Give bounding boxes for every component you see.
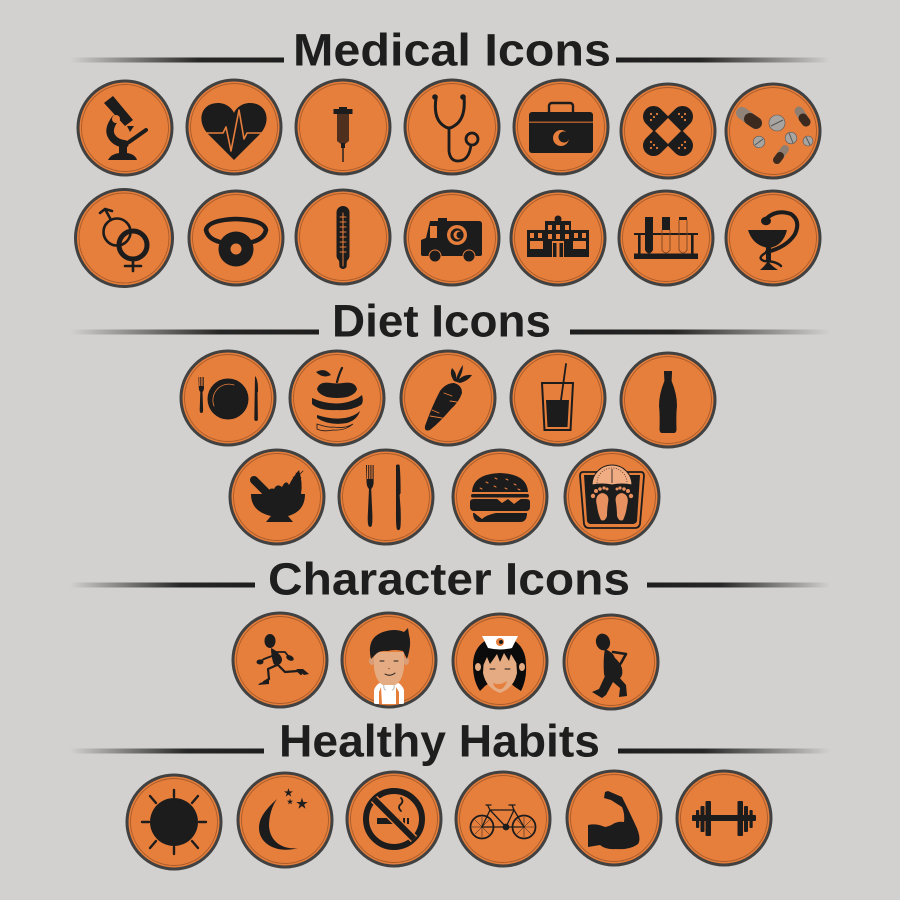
heading: Healthy Habits: Healthy Habits <box>279 716 600 766</box>
icon: peeled apple <box>290 351 384 445</box>
heading: Medical Icons <box>70 24 830 76</box>
icon: thermometer <box>296 190 390 284</box>
icon: mortar and pestle with herbs <box>230 450 324 544</box>
icon: crossed bandages <box>621 84 715 178</box>
icon: no smoking sign <box>347 772 441 866</box>
icon: crescent moon and stars: ★ <box>284 788 293 799</box>
icon: heart with pulse <box>187 80 281 174</box>
icon: bicycle <box>456 772 550 866</box>
icon: gender symbols <box>76 190 172 286</box>
icon: glass with straw <box>511 351 605 445</box>
icon: microscope <box>78 81 172 175</box>
icon: dumbbell <box>677 771 771 865</box>
icon: flexed arm muscle <box>567 771 661 865</box>
icon: male doctor character <box>342 613 436 707</box>
icon: sun <box>127 775 221 869</box>
heading: Medical Icons: Medical Icons <box>293 24 611 76</box>
heading: Character Icons: Character Icons <box>268 554 630 604</box>
heading: Diet Icons: Diet Icons <box>332 296 551 346</box>
icon: ambulance <box>405 191 499 285</box>
heading: Diet Icons <box>70 296 830 346</box>
icon: bowl of hygieia <box>726 191 820 285</box>
icon: plate and cutlery <box>181 351 275 445</box>
icon: female nurse character <box>453 614 547 708</box>
icon: hamburger <box>453 450 547 544</box>
icon: test tubes in rack <box>619 191 713 285</box>
icon: running figure <box>233 613 327 707</box>
icon: stethoscope <box>405 80 499 174</box>
icon: syringe <box>296 80 390 174</box>
heading: Healthy Habits <box>70 716 830 766</box>
icon: overweight walking figure <box>564 615 658 709</box>
icon: crescent moon and stars: ★ <box>296 796 308 811</box>
heading: Character Icons <box>70 554 830 604</box>
icon: medical briefcase <box>514 80 608 174</box>
icon: pills and capsules <box>726 84 820 178</box>
icon: bathroom scale <box>565 450 659 544</box>
icon: soda bottle <box>621 353 715 447</box>
icon: head mirror <box>189 191 283 285</box>
icon: crescent moon and stars <box>238 773 332 867</box>
icon: crescent moon and stars: ★ <box>287 798 294 806</box>
icon: hospital building <box>511 191 605 285</box>
infographic canvas <box>74 32 824 870</box>
icon: fork and knife <box>339 450 433 544</box>
icon: carrot <box>401 351 495 445</box>
